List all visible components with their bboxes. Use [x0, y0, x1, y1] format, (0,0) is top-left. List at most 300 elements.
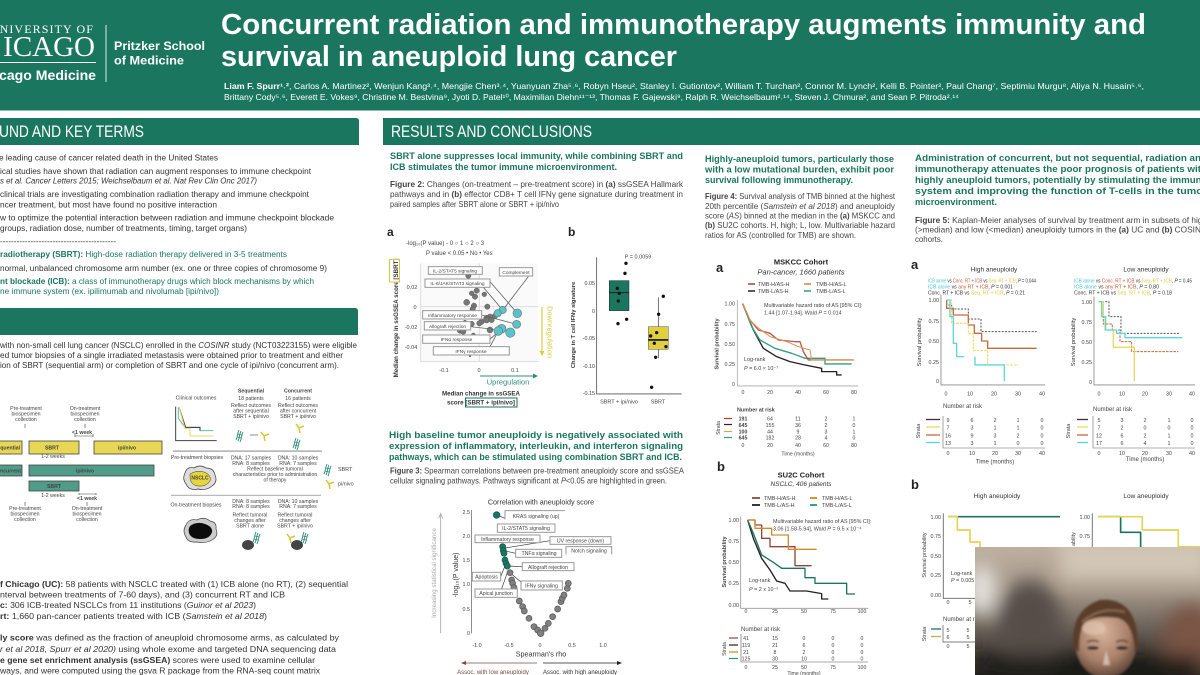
risk table: 2 [803, 650, 806, 656]
chart 5b: COSINR high aneuploidy survival: 0.25 [930, 573, 941, 579]
chart 2a: ssGSEA scatter: a [387, 225, 394, 239]
chart 2b: IFN signature boxplot: -0.05 [583, 336, 595, 342]
header band [0, 0, 1200, 110]
text block: background bullets: w to optimize the potential interaction between radiation and immune checkpoint blockade [0, 212, 334, 222]
risk table: 0 [1040, 441, 1044, 447]
risk table: 0 [861, 650, 864, 656]
comparison P values [928, 278, 1036, 296]
chart 2b: IFN signature boxplot: 0 [592, 309, 595, 315]
chart 2b: IFN signature boxplot [568, 225, 682, 406]
pathway labels [428, 268, 530, 355]
chart 3: volcano plot: -log₁₀(P value) [453, 553, 460, 597]
chart 5a: UC high aneuploidy survival: 1.00 [928, 298, 939, 304]
icon: post-treatment tumor with SBRT [242, 532, 260, 550]
chart 5a: UC low aneuploidy survival: Survival probability [1071, 318, 1077, 366]
trial schema: treatment timeline: collection [14, 517, 36, 523]
risk table: 0 [861, 656, 864, 662]
risk table: 2 [994, 418, 996, 424]
risk table [722, 627, 868, 675]
axis tick labels: 0.1 [511, 368, 519, 374]
legend: TMB-H/AS-H [758, 282, 790, 288]
trial schema: sample overview: Clinical outcomes [176, 396, 217, 402]
chart 5a: UC high aneuploidy survival: 0 [936, 379, 939, 385]
risk table: 50 [801, 665, 807, 671]
axis tick labels: 0.02 [407, 285, 417, 291]
chart 4a: MSKCC survival: 0.25 [724, 362, 735, 368]
chart 4a: MSKCC survival: 60 [823, 390, 829, 396]
figure 2 caption: pathways and in (b) effector CD8+ T cell IFNγ gene signature during treatment in [390, 189, 683, 199]
chart 4a: MSKCC survival: Pan-cancer, 1660 patients [757, 268, 845, 276]
chart 5a: UC high aneuploidy survival: 0.25 [928, 360, 939, 366]
panel heading: results and conclusions: RESULTS AND CONCLUSIONS [391, 122, 592, 141]
risk table: 7 [946, 426, 950, 432]
trial schema: treatment timeline: ipi/nivo [76, 468, 94, 474]
authors: Brittany Cody⁵˒⁶, Everett E. Vokes⁹, Christine M. Bestvina⁹, Jyoti D. Patel¹⁰, Maximilian Diehn¹¹⁻¹³, Thomas F. Gajewski⁹, Ralph R. Weichselbaum²˒¹⁴, Steven J. Chmura², and Sean P. Pitroda²˒¹⁴ [224, 92, 959, 102]
risk table: 0 [946, 451, 950, 457]
chart 5a: UC low aneuploidy survival: Low aneuploidy [1123, 266, 1169, 274]
panel heading: background and key terms [0, 118, 359, 145]
trial schema: treatment timeline: biospecimen [10, 512, 40, 518]
chart 4a: MSKCC survival: Log-rank [744, 357, 766, 363]
risk table: 7 [1098, 426, 1100, 432]
risk table: 0 [1190, 418, 1194, 424]
chart 4b: SU2C survival: 25 [772, 609, 778, 615]
chart 4b: SU2C survival: 3.06 [1.58-5.94], Wald P = 9.5 x 10⁻⁴ [773, 526, 862, 532]
legend: TMB-H/AS-L [822, 496, 853, 502]
chart 5a: UC high aneuploidy survival: 0 [944, 392, 948, 398]
legend: TMB-L/AS-H [764, 503, 795, 509]
text block: cohorts and analysis methods: rt: 1,660 pan-cancer patients treated with ICB ( Samstein et al 2018 ) [0, 611, 267, 621]
trial schema: treatment timeline: <1 week [77, 496, 97, 502]
text block: cohorts and analysis methods: r et al 2018, Spurr et al 2020) using whole exome and targeted DNA sequencing data [0, 644, 336, 654]
axis tick labels: 0 [413, 305, 417, 311]
risk table: 28 [795, 436, 801, 442]
volcano axis ticks [462, 510, 607, 649]
volcano pathway labels [475, 514, 607, 597]
volcano pathway labels: Apoptosis [475, 574, 498, 580]
risk table: 40 [1189, 451, 1195, 457]
chart 4b: SU2C survival: Survival probability [722, 536, 728, 588]
risk table: 0 [853, 436, 856, 442]
trial schema: sample overview: Concurrent [284, 388, 312, 394]
volcano axis ticks: 1.0 [599, 643, 607, 649]
risk table: 100 [858, 665, 866, 671]
volcano pathway labels: UV response (down) [557, 538, 604, 544]
green concurrent arm bars [0, 465, 154, 491]
section heading: aneuploidy and immune pathways: High baseline tumor aneuploidy is negatively associated with [389, 430, 683, 441]
chart 4b: SU2C survival: 50 [801, 609, 807, 615]
title [221, 9, 1146, 73]
risk table: 80 [851, 443, 857, 449]
risk table: 0 [832, 656, 835, 662]
risk table [916, 404, 1045, 466]
chart 3: volcano plot: Increasing statistical significance [431, 528, 438, 618]
chart 5b: COSINR high aneuploidy survival: 0.50 [930, 554, 941, 560]
significance arrow [439, 513, 443, 633]
risk table: 1 [1016, 426, 1020, 432]
chart 5a: UC low aneuploidy survival: 1.00 [1082, 300, 1092, 306]
chart 4b: SU2C survival: 75 [830, 609, 836, 615]
risk table: 100 [739, 430, 747, 436]
risk table: 182 [766, 436, 774, 442]
yellow sequential arm bars [0, 441, 162, 454]
trial schema: sample overview: of therapy [263, 478, 287, 484]
trial schema: sample overview: Reflect outcomes [278, 403, 318, 409]
figure 2 caption [390, 179, 684, 209]
risk table: 3 [1120, 418, 1124, 424]
chart 4b: SU2C survival: Log-rank [749, 578, 771, 584]
comparison P values: Conc. RT + ICB vs Seq. RT + ICB, P = 0.21 [928, 290, 1025, 296]
volcano axis ticks: -0.5 [504, 643, 514, 649]
legend: SBRT and ipi/nivo icons [324, 464, 354, 489]
text block: cohorts and analysis methods: e gene set enrichment analysis (ssGSEA) scores were used to examine cellular [0, 655, 315, 665]
risk table: 10 [801, 656, 807, 662]
column 2 heading: with a low mutational burden, exhibit poor [704, 164, 894, 176]
chart 5b: COSINR high aneuploidy survival: Survival probability [922, 532, 928, 578]
text block: key terms: ne immune system (ex. ipilimumab and nivolumab [ipi/nivo]) [0, 286, 219, 296]
chart 5a: UC low aneuploidy survival: 40 [1189, 392, 1195, 398]
risk table: 6 [970, 418, 974, 424]
risk table: 30 [772, 656, 778, 662]
legend [748, 282, 847, 295]
risk table [1066, 407, 1195, 463]
risk table: 10 [969, 451, 975, 457]
figure 5 caption: (>median) and low (<median) aneuploidy tumors in the (a) UC and (b) COSINR [915, 224, 1200, 234]
chart 2b: IFN signature boxplot: 0.05 [584, 281, 595, 287]
risk table: Number at risk [741, 627, 781, 633]
risk table [922, 617, 983, 650]
risk table: 0 [832, 643, 835, 649]
figure 3 caption: Figure 3: Spearman correlations between pre-treatment aneuploidy score and ssGSEA [390, 466, 684, 476]
risk table: 0 [1016, 441, 1020, 447]
chart 4a: MSKCC survival: Multivariable hazard ratio of AS [95% CI]: [764, 303, 862, 309]
chart 5b: COSINR high aneuploidy survival: 0 [946, 600, 950, 606]
legend: TMB-L/AS-H [758, 289, 789, 295]
chart 4a: MSKCC survival: 0 [742, 390, 745, 396]
chart 4a: MSKCC survival: 80 [851, 390, 857, 396]
trial schema: treatment timeline: SBRT [45, 446, 60, 452]
risk table: 2 [1144, 418, 1146, 424]
chart 3: volcano plot [431, 498, 622, 675]
chart 4a: MSKCC survival: P = 6.0 × 10⁻⁷ [744, 366, 778, 372]
chart 4b: SU2C survival: 0.75 [728, 539, 739, 545]
risk table: 0 [1168, 426, 1170, 432]
chart 4b: SU2C survival: 0.00 [728, 603, 739, 609]
risk table: 21 [772, 643, 778, 649]
risk table: 36 [795, 423, 801, 429]
trial schema: treatment timeline: 1-2 weeks [41, 454, 65, 460]
risk table: 0 [946, 644, 950, 650]
comparison P values [1074, 278, 1192, 296]
chart 5a: UC high aneuploidy survival: 20 [991, 392, 997, 398]
risk table: 21 [743, 650, 749, 656]
chart 5b: COSINR high aneuploidy survival: 5 [968, 600, 972, 606]
panel heading: results and conclusions [383, 118, 1200, 145]
text block: methods intro: with non-small cell lung cancer (NSCLC) enrolled in the COSINR study (NCT03223155) were eligible [0, 340, 357, 350]
text block: background bullets [0, 152, 334, 246]
risk table: 2 [825, 416, 828, 422]
volcano pathway labels: Apical junction [479, 591, 513, 597]
trial schema: sample overview [170, 388, 354, 550]
legend: SBRT and ipi/nivo icons: pi/nivo [338, 482, 354, 488]
risk table: 1 [1168, 434, 1170, 440]
volcano axis ticks: 2.0 [462, 534, 470, 540]
risk table: Strata [1066, 424, 1072, 438]
chart 2b: IFN signature boxplot: b [568, 225, 575, 239]
chart 5b: COSINR low aneuploidy survival: Low aneuploidy [1123, 493, 1169, 500]
size and significance legend [406, 241, 493, 257]
volcano axis ticks: 0.5 [568, 643, 576, 649]
chart 5a: UC low aneuploidy survival: 0.25 [1082, 360, 1092, 366]
icon: on-treatment tumor [184, 518, 217, 543]
risk table: 645 [739, 423, 747, 429]
text block: cohorts and analysis methods: ly score was defined as the fraction of aneuploid chromosome arms, as calculated by [0, 632, 340, 642]
risk table: 1 [1168, 441, 1170, 447]
risk table: 40 [1039, 451, 1045, 457]
risk table: 20 [767, 443, 773, 449]
risk table: Time (months) [976, 460, 1014, 466]
risk table: 5 [1098, 418, 1100, 424]
trial schema: sample overview: changes after [279, 518, 311, 524]
text block: cohorts and analysis methods [0, 579, 348, 675]
size and significance legend: -log₁₀(P value) - 0 ○ 1 ○ 2 ○ 3 [406, 241, 485, 247]
chart 2b: IFN signature boxplot: -0.10 [583, 364, 595, 370]
chart 4a: MSKCC survival: 1.00 [724, 302, 735, 308]
chart 4a: MSKCC survival: a [716, 260, 724, 275]
risk table [716, 408, 857, 458]
risk table: 60 [823, 443, 829, 449]
icon: concurrent antibody and DNA [293, 424, 304, 450]
trial schema: sample overview: Reflect tumoral [233, 512, 267, 518]
chart 5a: UC low aneuploidy survival: 0 [1098, 392, 1100, 398]
trial schema: treatment timeline: Pre-treatment [9, 506, 41, 512]
pathway labels: IFNγ response [455, 349, 487, 355]
column 2 heading: Highly-aneuploid tumors, particularly those [705, 154, 894, 165]
figure 2 caption: paired samples after SBRT alone or SBRT + ipi/nivo [390, 199, 559, 209]
trial schema: sample overview: after sequential [233, 408, 269, 414]
webcam video overlay [968, 540, 1200, 675]
risk table: 2 [825, 423, 828, 429]
volcano pathway labels: Notch signaling [571, 548, 607, 554]
risk table: 0 [742, 443, 745, 449]
comparison P values: ICB alone vs any RT + ICB , P = 0.80 [1074, 284, 1159, 290]
mini survival chart [176, 407, 217, 441]
chart 5a: UC low aneuploidy survival: 0 [1089, 380, 1092, 386]
risk table: 8 [774, 650, 777, 656]
chart 5b: COSINR low aneuploidy survival: 0.75 [1080, 534, 1090, 540]
risk table: 30 [1166, 451, 1172, 457]
trial schema: sample overview: Reflect tumoral [278, 512, 312, 518]
chart 4b: SU2C survival: 0.25 [728, 581, 739, 587]
volcano pathway labels: Allograft rejection [528, 565, 568, 571]
text block: background bullets: ical studies have shown that radiation can augment responses to immune checkpoint [0, 166, 312, 176]
column 1 heading [390, 151, 683, 173]
chart 5a: UC high aneuploidy survival: Survival probability [917, 318, 923, 366]
trial schema: treatment timeline: biospecimen [11, 412, 41, 418]
risk table: 0 [1040, 418, 1044, 424]
risk table: 0 [1098, 451, 1100, 457]
axis tick labels: -0.04 [405, 345, 417, 351]
text block: background bullets: groups, radiation dose, number of treatments, timing, target organs) [0, 223, 247, 233]
text block: key terms: radiotherapy (SBRT): High-dose radiation therapy delivered in 3-5 treatments [0, 249, 287, 259]
chart 5a: UC high aneuploidy survival: High aneuploidy [971, 266, 1018, 274]
arrow: downregulation: Downregulation [546, 306, 554, 358]
trial schema: sample overview: On-treatment biopsies [170, 502, 222, 508]
trial schema: sample overview: SBRT alone [236, 524, 264, 530]
volcano pathway labels: TNFα signaling [521, 551, 557, 557]
trial schema: sample overview: DNA: 8 samples [232, 499, 270, 505]
chart 4b: SU2C survival: b [717, 459, 725, 474]
risk table: Strata [922, 627, 928, 641]
chart 4b: SU2C survival: 0.50 [728, 560, 739, 566]
figure 5 caption [915, 215, 1200, 244]
section heading: aneuploidy and immune pathways: expression of inflammatory, interleukin, and interferon signaling [389, 441, 683, 452]
figure 4 caption: 20th percentile (Samstein et al 2018) and aneuploidy [705, 201, 896, 211]
trial schema: sample overview: Pre-treatment biopsies [171, 455, 223, 461]
legend: SBRT and ipi/nivo icons: SBRT [338, 467, 353, 473]
trial schema: sample overview: RNA: 8 samples [232, 504, 270, 510]
figure 4 caption: score (AS) binned at the median in the (a) MSKCC and [705, 210, 895, 220]
column 3 heading: highly aneuploid tumors, potentially by stimulating the immune [915, 175, 1200, 186]
trial schema: sample overview: changes after [234, 518, 266, 524]
chart 5a: UC high aneuploidy survival: 40 [1039, 392, 1045, 398]
risk table: 119 [742, 643, 750, 649]
chart 5b: COSINR high aneuploidy survival: 1.00 [930, 515, 941, 521]
risk table: 4 [1144, 441, 1146, 447]
risk table: 0 [1040, 434, 1044, 440]
risk table: 191 [739, 416, 747, 422]
text block: methods intro: ion of SBRT (sequential arm) or completion of SBRT and one cycle of ipi/nivo (concurrent arm). [0, 360, 339, 370]
risk table: 9 [797, 430, 800, 436]
trial schema: treatment timeline: Pre-treatment [10, 406, 42, 412]
figure 4 caption [705, 191, 896, 240]
logo: University of Chicago Medicine: Pritzker School [114, 41, 205, 53]
risk table: Time (months) [781, 452, 815, 458]
column 3 heading: immunotherapy attenuates the poor prognosis of patients with [915, 164, 1200, 175]
connector lines [497, 515, 550, 593]
risk table: 17 [1096, 441, 1102, 447]
chart 5b: COSINR high aneuploidy survival: 0.00 [930, 593, 941, 599]
figure 2 caption: Figure 2: Changes (on-treatment – pre-treatment score) in (a) ssGSEA Hallmark [390, 179, 684, 189]
risk table: 25 [772, 665, 778, 671]
chart 5b: COSINR high aneuploidy survival [911, 477, 1060, 650]
panel heading: methods [0, 308, 358, 335]
risk table: Strata [916, 424, 922, 438]
x axis title with combo highlight: score [SBRT + ipi/nivo] [447, 400, 515, 406]
chart 4b: SU2C survival: 100 [858, 609, 866, 615]
risk table: 0 [1190, 426, 1194, 432]
risk table: 2 [1016, 434, 1020, 440]
text block: background bullets: e leading cause of cancer related death in the United States [0, 152, 218, 162]
chart 5a: UC high aneuploidy survival: 10 [967, 392, 973, 398]
axis tick labels: -0.1 [439, 368, 449, 374]
chart 4a: MSKCC survival: 0.75 [724, 322, 735, 328]
figure 4 caption: ratios for AS (controlled for TMB) are shown. [705, 230, 856, 240]
trial schema: sample overview: 16 patients [285, 396, 311, 402]
risk table: Number at risk [737, 408, 775, 414]
risk table: 16 [945, 434, 951, 440]
trial schema: treatment timeline: 1-2 weeks [41, 493, 65, 499]
chart 4a: MSKCC survival [714, 258, 862, 458]
trial schema: treatment timeline: On-treatment [70, 406, 101, 412]
text block: background bullets: s et al. Cancer Letters 2015; Weichselbaum et al. Nat Rev Clin Onc 2017) [0, 176, 257, 186]
risk table: Strata [722, 642, 728, 656]
chart 5a: UC low aneuploidy survival: 0.50 [1082, 340, 1092, 346]
volcano axis ticks: -1.0 [472, 643, 482, 649]
chart 5a: UC low aneuploidy survival: 10 [1119, 392, 1125, 398]
panel heading: background and key terms: UND AND KEY TERMS [0, 122, 144, 141]
risk table: 75 [830, 665, 836, 671]
chart 4a: MSKCC survival: 40 [795, 390, 801, 396]
volcano pathway labels: Inflammatory response [481, 537, 534, 543]
trial schema: treatment timeline [0, 406, 162, 523]
trial schema: sample overview: characteristics prior to administration [233, 472, 317, 478]
text block: cohorts and analysis methods: c: 306 ICB-treated NSCLCs from 11 institutions (Guinor et al 2023) [0, 600, 256, 610]
risk table: 40 [795, 443, 801, 449]
chart 5a: UC low aneuploidy survival: 20 [1142, 392, 1148, 398]
column 3 heading: microenvironment. [915, 197, 997, 208]
chart 3: volcano plot: Correlation with aneuploidy score [488, 498, 594, 506]
risk table: Number at risk [943, 617, 983, 623]
volcano pathway labels: KRAS signaling (up) [513, 514, 560, 520]
risk table: 0 [861, 636, 864, 642]
trial schema: sample overview: 18 patients [238, 396, 264, 402]
risk table: 4 [825, 436, 828, 442]
arrow: upregulation [480, 374, 538, 386]
box: SBRT + ipi/nivo [609, 262, 629, 325]
volcano axis ticks: 1.0 [462, 582, 470, 588]
text block: methods intro [0, 340, 357, 370]
chart 2b: IFN signature boxplot: P = 0.0059 [625, 254, 651, 260]
axis tick labels: 0 [477, 368, 481, 374]
pathway labels: Complement [502, 270, 530, 276]
chart 4a: MSKCC survival: 0 [732, 382, 735, 388]
risk table: Number at risk [943, 404, 983, 410]
volcano axis ticks: 0 [538, 643, 542, 649]
chart 5b: COSINR high aneuploidy survival: Log-rank [951, 571, 973, 577]
figure 3 caption: cellular signaling pathways. Pathways significant at P<0.05 are highlighted in green. [390, 476, 667, 486]
risk table: 30 [1015, 451, 1021, 457]
column 2 heading [704, 154, 894, 186]
chart 2b: IFN signature boxplot: -0.15 [583, 391, 595, 397]
risk table: 0 [853, 423, 856, 429]
chart 5a: UC high aneuploidy survival [911, 257, 1045, 466]
trial schema: sample overview: Reflect outcomes [231, 403, 271, 409]
text block: key terms [0, 249, 327, 296]
trial schema: treatment timeline: On-treatment [72, 506, 103, 512]
risk table: 5 [966, 644, 970, 650]
risk table: 1 [994, 426, 996, 432]
column 3 heading: Administration of concurrent, but not sequential, radiation and [915, 153, 1200, 164]
text block: background bullets: ncer treatment, but most have found no positive interaction [0, 200, 217, 210]
text block: cohorts and analysis methods: f Chicago (UC): 58 patients with NSCLC treated with (1) ICB alone (no RT), (2) sequential [0, 579, 348, 589]
risk table: 5 [946, 628, 950, 634]
comparison P values: Conc. RT + ICB vs Seq. RT + ICB, P = 0.18 [1074, 290, 1172, 296]
trial schema: sample overview: DNA: 10 samples [278, 499, 319, 505]
chart 5a: UC low aneuploidy survival: 0.75 [1082, 320, 1092, 326]
trial schema: sample overview: after concurrent [280, 408, 317, 414]
risk table: 1 [1168, 418, 1170, 424]
chart 4a: MSKCC survival: MSKCC Cohort [774, 258, 829, 266]
volcano pathway labels: IL-2/STAT5 signaling [502, 526, 550, 532]
logo: University of Chicago Medicine: cago Medicine [0, 67, 96, 83]
legend: TMB-H/AS-L [816, 282, 847, 288]
y axis title with SBRT highlight [390, 259, 400, 377]
chart 2a: ssGSEA scatter [387, 225, 554, 407]
chart 5a: UC high aneuploidy survival: a [911, 257, 919, 272]
risk table: 5 [966, 635, 970, 641]
chart 4b: SU2C survival: P = 2 x 10⁻⁵ [749, 587, 779, 593]
